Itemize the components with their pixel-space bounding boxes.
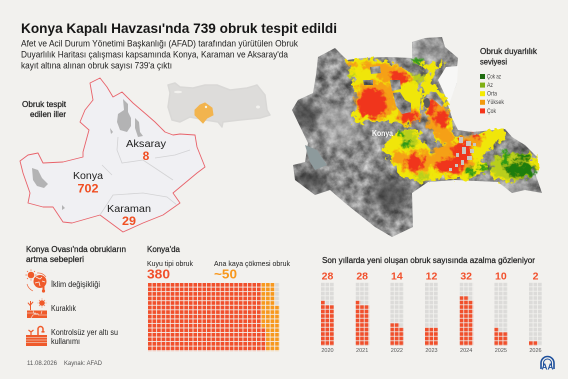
column 2022: 14 (391, 271, 403, 283)
waffle grid (148, 283, 280, 351)
column 2024 (460, 271, 473, 354)
intro text block: kayıt altına alınan obruk sayısı 739'a çıktı (21, 60, 172, 70)
column 2020: 28 (322, 271, 333, 283)
panel: yearly chart (321, 256, 542, 354)
causes heading (26, 245, 126, 264)
legend item: Çok (487, 109, 497, 115)
lake (305, 145, 327, 170)
province label: Konya (73, 170, 103, 196)
column 2020: 2020 (321, 348, 334, 354)
map: provinces with counts (20, 78, 205, 232)
column 2025: 10 (495, 271, 507, 283)
column 2024: 32 (460, 271, 472, 283)
date and source: Kaynak: AFAD (64, 360, 102, 367)
column 2024: 2024 (460, 348, 472, 354)
province label: Karaman: Karaman (107, 203, 151, 215)
stat: bedrock collapse (214, 259, 290, 282)
label: provinces heading: edilen iller (30, 110, 66, 119)
susceptibility layers (347, 58, 538, 182)
label: provinces heading: Obruk tespit (22, 100, 67, 109)
title: Konya Kapalı Havzası'nda 739 obruk tespit edildi (21, 20, 337, 36)
column 2025: 2025 (495, 348, 507, 354)
inset map: Turkey (168, 83, 270, 127)
intro text block: Afet ve Acil Durum Yönetimi Başkanlığı (AFAD) tarafından yürütülen Obruk (21, 38, 298, 48)
stat: well type: 380 (147, 266, 170, 282)
legend item: Yüksek (487, 100, 505, 106)
causes heading: artma sebepleri (26, 255, 84, 264)
province outline (20, 78, 205, 232)
panel: causes (26, 245, 126, 346)
column 2026: 2026 (529, 348, 542, 354)
map label: Konya (372, 129, 393, 138)
column 2026: 2 (533, 271, 539, 283)
legend item: Az (487, 83, 493, 89)
province label: Aksaray: Aksaray (126, 138, 167, 150)
province label: Aksaray: 8 (143, 149, 150, 163)
icon: climate change (26, 270, 46, 293)
text: groundwater use (51, 328, 118, 346)
column 2021: 28 (356, 271, 368, 283)
column 2023: 12 (426, 271, 437, 283)
panel: Konya waffle chart (147, 244, 290, 351)
column 2020 (321, 271, 334, 354)
icon: drought (27, 298, 47, 318)
speckles (449, 137, 476, 171)
intro text block: Duyarlılık Haritası çalışması kapsamında Konya, Karaman ve Aksaray'da (21, 50, 288, 60)
white area (438, 66, 458, 104)
label: provinces heading (22, 100, 67, 119)
text: climate change: İklim değişikliği (51, 280, 100, 289)
legend item: Orta (487, 92, 498, 98)
lakes (32, 99, 143, 210)
icon: AA logo (541, 357, 554, 372)
date and source: 11.08.2026 (27, 360, 57, 367)
yearly heading: Son yıllarda yeni oluşan obruk sayısında azalma gözleniyor (322, 256, 535, 265)
stat: bedrock collapse: ~50 (214, 266, 237, 282)
column 2023: 2023 (425, 348, 438, 354)
text: groundwater use: kullanımı (51, 337, 80, 346)
text: groundwater use: Kontrolsüz yer altı su (51, 328, 118, 337)
legend item: Çok az (487, 74, 501, 80)
column 2026 (529, 271, 542, 354)
column 2023 (425, 271, 438, 354)
waffle heading: Konya'da (147, 244, 180, 254)
column 2025 (494, 271, 508, 354)
column 2022 (390, 271, 404, 354)
province label: Karaman: 29 (122, 214, 136, 228)
legend: Obruk duyarlılık (480, 47, 538, 56)
terrain (285, 35, 547, 240)
province label: Aksaray (126, 138, 167, 163)
intro text block (21, 38, 298, 70)
stat: bedrock collapse: Ana kaya çökmesi obruk (214, 259, 290, 268)
legend (480, 47, 538, 115)
column 2021: 2021 (356, 348, 368, 354)
column 2022: 2022 (391, 348, 403, 354)
province label: Konya: 702 (78, 182, 99, 196)
causes heading: Konya Ovası'nda obrukların (26, 245, 126, 254)
column 2021 (356, 271, 369, 354)
province label: Karaman (107, 203, 151, 228)
date and source (27, 360, 102, 367)
stat: well type: Kuyu tipi obruk (147, 259, 193, 268)
text: drought: Kuraklık (51, 304, 77, 313)
province label: Konya: Konya (73, 170, 103, 182)
map: sinkhole susceptibility (285, 35, 547, 240)
stat: well type (147, 259, 193, 282)
icon: AA logo: AA (542, 362, 554, 372)
dark spot (424, 98, 430, 108)
icon: groundwater use (26, 326, 47, 346)
legend: seviyesi (480, 58, 507, 66)
